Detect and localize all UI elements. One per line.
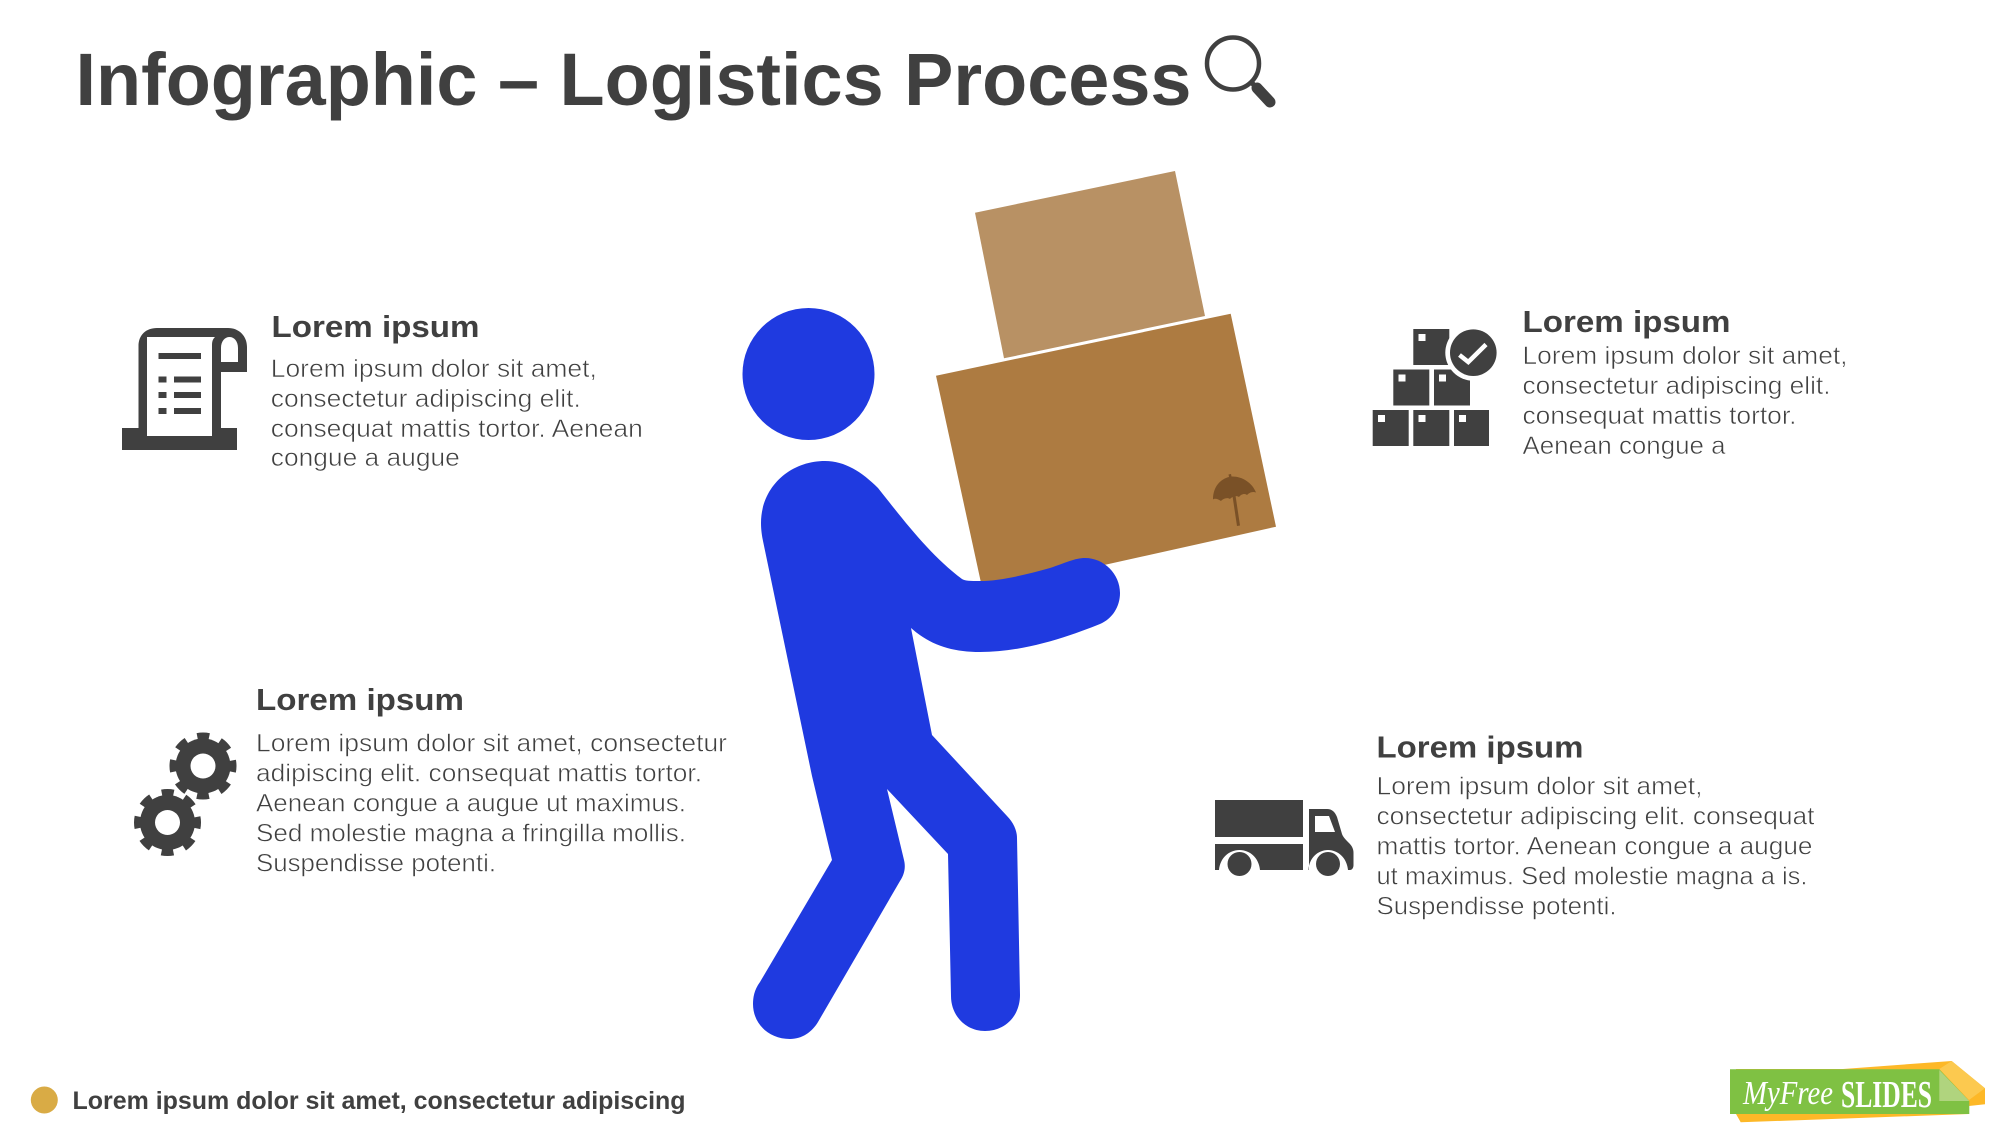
footer text: Lorem ipsum dolor sit amet, consectetur adipiscing — [72, 1087, 686, 1115]
text block: bottom right: consectetur adipiscing elit. consequat — [1376, 802, 1815, 830]
heading: bottom right: Lorem ipsum — [1376, 730, 1584, 764]
large box — [936, 314, 1276, 592]
panel: top right text and boxes icon — [1373, 304, 1848, 460]
heading: top left: Lorem ipsum — [272, 309, 480, 344]
text block: bottom left: adipiscing elit. consequat mattis tortor. — [256, 760, 702, 788]
icon: magnifying glass — [1207, 38, 1270, 102]
text block: top right: Aenean congue a — [1522, 432, 1726, 460]
text block: bottom left — [256, 730, 727, 878]
title: Infographic – Logistics Process — [76, 38, 1192, 121]
icon: umbrella — [1213, 474, 1256, 526]
text block: top right — [1522, 342, 1848, 460]
text block: top left — [271, 355, 643, 472]
text block: bottom left: Lorem ipsum dolor sit amet, consectetur — [256, 730, 727, 758]
logo: MyFreeSlides: MyFree — [1742, 1075, 1833, 1112]
heading: bottom left: Lorem ipsum — [256, 682, 464, 717]
person body — [753, 461, 1120, 1039]
text block: bottom right — [1376, 772, 1815, 920]
footer note — [31, 1086, 686, 1115]
text block: bottom left: Suspendisse potenti. — [256, 850, 496, 878]
icon: gears — [138, 736, 232, 852]
text block: bottom left: Aenean congue a augue ut maximus. — [256, 790, 686, 818]
text block: bottom right: mattis tortor. Aenean congue a augue — [1376, 832, 1812, 860]
text block: bottom right: Lorem ipsum dolor sit amet, — [1376, 772, 1702, 800]
text block: top left: congue a augue — [271, 444, 460, 472]
text block: bottom right: ut maximus. Sed molestie magna a is. — [1376, 862, 1808, 890]
icon: stacked boxes with check — [1373, 325, 1501, 446]
text block: top left: consectetur adipiscing elit. — [271, 385, 581, 413]
text block: top right: consequat mattis tortor. — [1522, 402, 1796, 430]
top box — [975, 171, 1205, 358]
person head — [742, 308, 874, 440]
heading: top right: Lorem ipsum — [1522, 304, 1730, 339]
icon: paper scroll — [122, 328, 247, 450]
panel: bottom left text and gears icon — [138, 682, 727, 878]
text block: top right: Lorem ipsum dolor sit amet, — [1522, 342, 1848, 370]
logo: MyFreeSlides: SLIDES — [1841, 1074, 1932, 1116]
illustration: person carrying boxes — [742, 171, 1276, 1039]
panel: bottom right text and truck icon — [1215, 730, 1815, 920]
icon: delivery truck — [1215, 800, 1354, 876]
text block: top right: consectetur adipiscing elit. — [1522, 372, 1830, 400]
text block: top left: consequat mattis tortor. Aenean — [271, 415, 643, 443]
text block: top left: Lorem ipsum dolor sit amet, — [271, 355, 597, 383]
panel: top left text and receipt icon — [122, 309, 643, 472]
text block: bottom left: Sed molestie magna a fringilla mollis. — [256, 820, 686, 848]
text block: bottom right: Suspendisse potenti. — [1376, 892, 1616, 920]
logo: MyFreeSlides — [1730, 1061, 1985, 1122]
footer bullet — [31, 1086, 58, 1114]
